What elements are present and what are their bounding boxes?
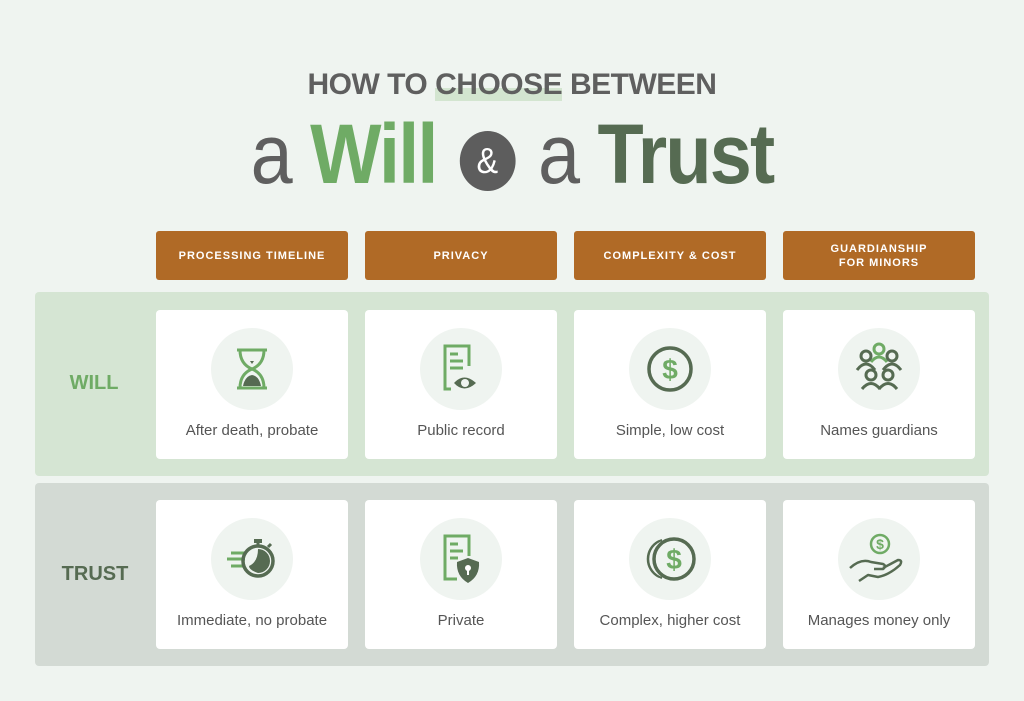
card: trust privacy: Private	[438, 612, 484, 629]
card: trust privacy	[365, 500, 557, 649]
card: will privacy: Public record	[417, 422, 505, 439]
header: processing timeline	[156, 231, 348, 280]
card: will guardians: Names guardians	[820, 422, 938, 439]
header: processing timeline: PROCESSING TIMELINE	[179, 250, 325, 262]
header: guardianship	[783, 231, 975, 280]
header: complexity & cost: COMPLEXITY & COST	[604, 250, 736, 262]
card: trust guardianship: Manages money only	[808, 612, 950, 629]
panel: will row	[35, 292, 989, 476]
header: guardianship: FOR MINORS	[839, 256, 919, 268]
card: trust cost: $	[666, 544, 682, 575]
card: will timeline	[156, 310, 348, 459]
row label: will: WILL	[70, 372, 118, 394]
card: trust guardianship	[783, 500, 975, 649]
card: trust timeline: Immediate, no probate	[177, 612, 327, 629]
card: will guardians	[783, 310, 975, 459]
card: will cost	[574, 310, 766, 459]
card: trust guardianship: $	[876, 536, 884, 552]
card: trust cost	[574, 500, 766, 649]
header: complexity & cost	[574, 231, 766, 280]
title line 2: a Will a Trust	[251, 107, 773, 201]
card: will privacy	[365, 310, 557, 459]
header: guardianship: GUARDIANSHIP	[831, 242, 927, 254]
card: trust timeline	[156, 500, 348, 649]
header: privacy	[365, 231, 557, 280]
title line 2: &	[477, 140, 498, 181]
card: trust cost: Complex, higher cost	[600, 612, 740, 629]
card: will timeline: After death, probate	[186, 422, 318, 439]
row label: trust: TRUST	[62, 563, 128, 585]
header: privacy: PRIVACY	[433, 250, 489, 262]
panel: trust row	[35, 483, 989, 666]
title line 1: HOW TO CHOOSE BETWEEN	[308, 68, 716, 101]
card: will cost: $	[662, 354, 678, 385]
card: will cost: Simple, low cost	[616, 422, 724, 439]
